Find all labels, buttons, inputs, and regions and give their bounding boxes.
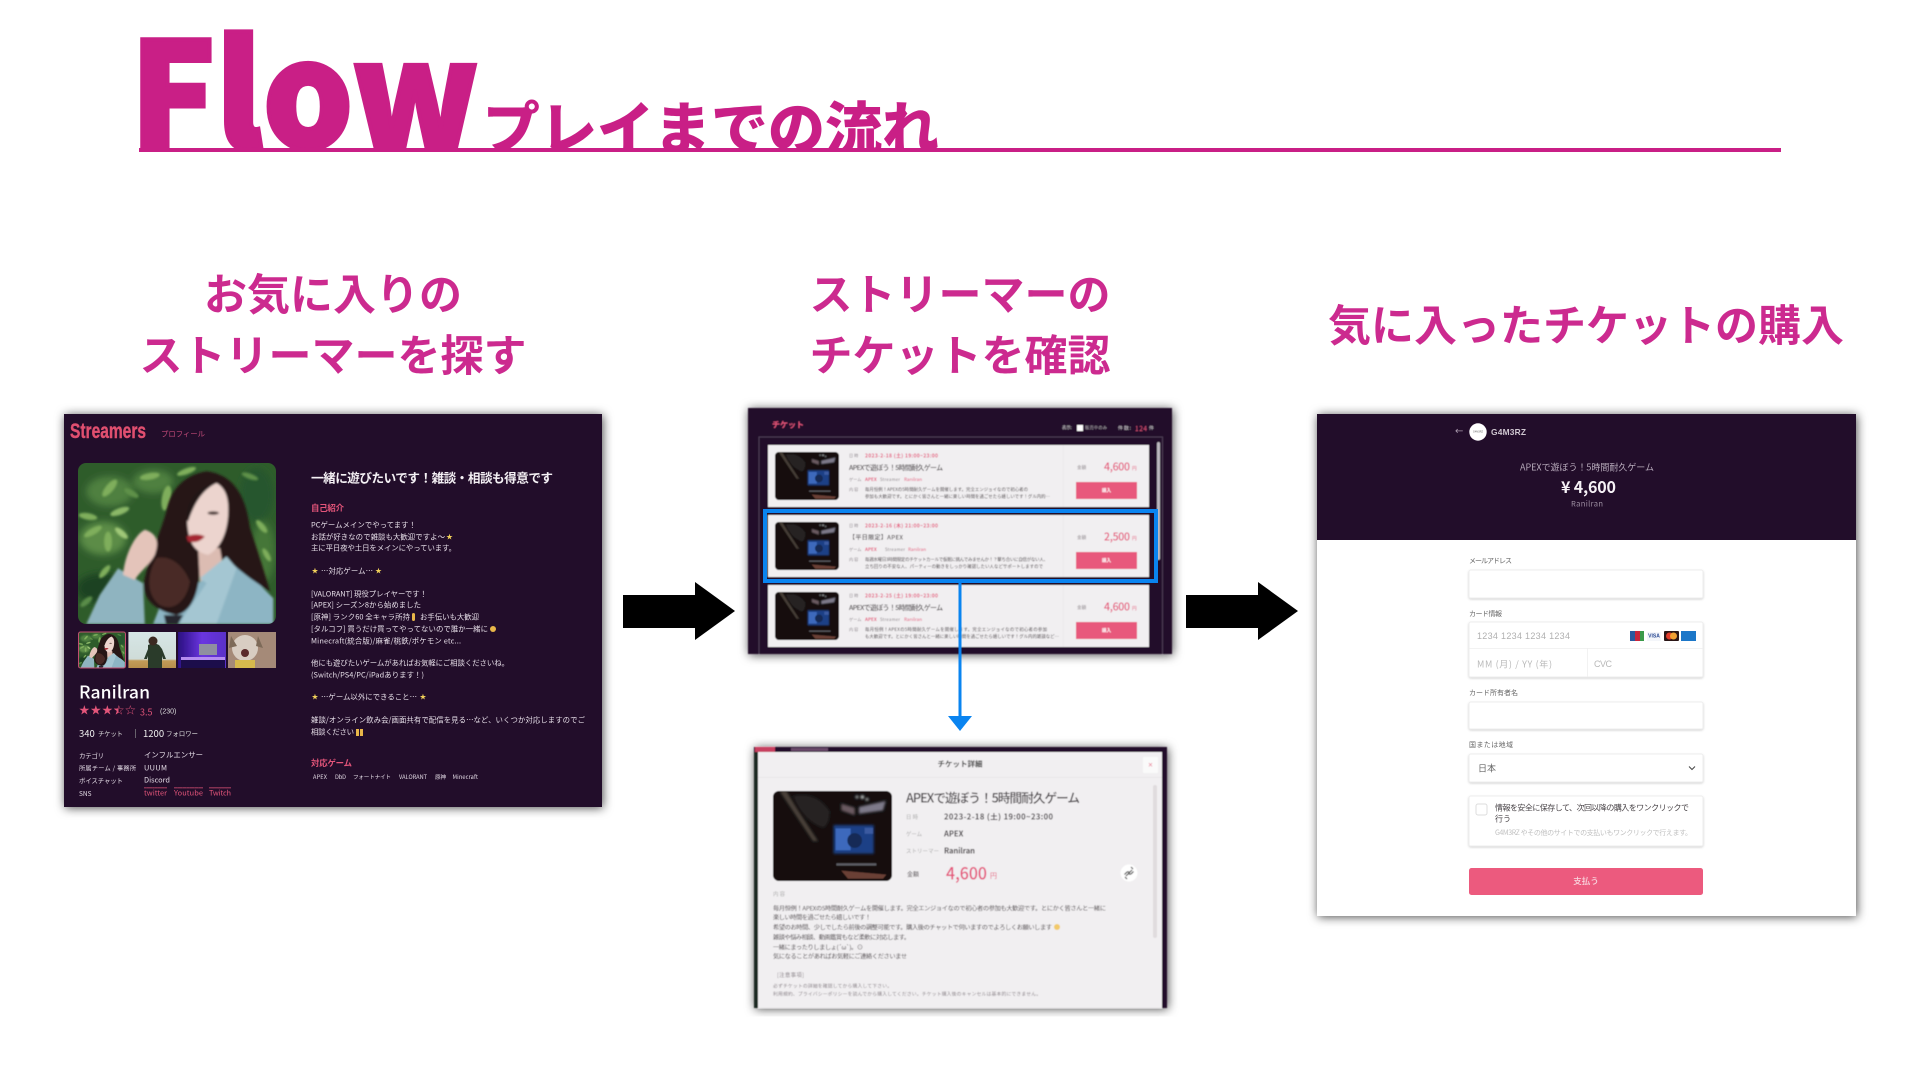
ticket card 2 (highlighted): ゲーム xyxy=(849,546,861,553)
ticket card 3: APEX xyxy=(864,617,877,623)
cardholder field xyxy=(1469,688,1703,729)
section: supported games: Minecraft xyxy=(452,773,479,781)
scrollbar xyxy=(1157,442,1160,560)
ticket card 3: Streamer xyxy=(880,617,900,623)
ticket card 3: Ranilran xyxy=(904,616,922,623)
ticket card 2 (highlighted): 【平日限定】APEX xyxy=(849,532,903,542)
rating stars xyxy=(80,705,176,716)
ticket facts: APEX xyxy=(943,828,964,840)
title xyxy=(139,29,1781,152)
card brand icons xyxy=(1630,631,1696,641)
title underline xyxy=(139,148,1781,152)
profile details table: カテゴリ xyxy=(79,750,104,760)
panel: streamer profile xyxy=(64,414,602,807)
ticket card 1 xyxy=(768,445,1149,507)
ticket facts: Ranilran xyxy=(944,846,975,856)
profile details table: UUUM xyxy=(144,762,167,774)
panel: payment xyxy=(1317,414,1856,916)
ticket card 1: 円 xyxy=(1132,466,1137,472)
rating stars: (230) xyxy=(160,708,176,716)
ticket facts: 金額 xyxy=(907,870,919,878)
heading: step 2 xyxy=(810,261,1110,384)
save info option xyxy=(1469,796,1703,846)
card field xyxy=(1469,609,1703,677)
panel: ticket list xyxy=(748,408,1172,654)
ticket facts: 2023-2-18 (土) 19:00~23:00 xyxy=(944,812,1054,822)
pay button xyxy=(1469,868,1703,895)
ticket card 1: 内 容 xyxy=(849,486,859,493)
ticket card 3: ゲーム xyxy=(849,616,861,623)
list filters and count: 件数: xyxy=(1118,424,1131,432)
list filters and count: 表示: xyxy=(1062,424,1072,431)
ticket card 2 (highlighted): 毎週水曜日3時間限定のチケットカールで仮眠に挑んでみませんか！？撃ち合いに自信がない人、 xyxy=(865,556,1048,563)
title words xyxy=(140,29,938,148)
ticket card 1: ゲーム xyxy=(849,476,861,483)
profile details table: ボイスチャット xyxy=(79,775,123,785)
section: self introduction: PCゲームメインでやってます！ xyxy=(311,520,416,530)
section: self introduction: Minecraft(統合版)/麻雀/桃鉄/ポケモン etc... xyxy=(311,636,461,646)
ticket card 2 (highlighted): 立ち回りの不安な人、パーティーの動きをしっかり確認したい人などサポートしますので xyxy=(865,563,1044,570)
card field: MM (月) / YY (年) xyxy=(1477,658,1552,670)
ticket photo xyxy=(773,791,892,881)
heading: step 3: 気に入ったチケットの購入 xyxy=(1328,292,1844,354)
ticket card 3: 毎月恒例！APEXの5時間耐久ゲームを開催します。完全エンジョイなので初心者の参加 xyxy=(865,626,1047,633)
country select xyxy=(1469,740,1703,782)
description text: 利用規約、プライバシーポリシーを読んでから購入してください。チケット購入後のキャンセルは基本的にできません。 xyxy=(773,990,1041,998)
rating stars: ★ xyxy=(90,704,102,718)
rating stars: ★ xyxy=(78,704,90,718)
payment header xyxy=(1317,414,1856,540)
ticket card 1: 金額 xyxy=(1077,464,1087,471)
profile details table: Discord xyxy=(144,774,170,786)
section: self introduction: [原神] ランク60 全キャラ所持 xyxy=(311,612,411,622)
description text: 雑談や悩み相談、動画鑑賞もなど柔軟に対応します。 xyxy=(773,932,910,942)
ticket card 2 (highlighted): 内 容 xyxy=(849,556,859,563)
ticket facts: 円 xyxy=(990,871,997,881)
list heading: チケット xyxy=(772,420,804,430)
ticket card 1: 購入 xyxy=(1102,487,1111,494)
ticket card 1: 参加も大歓迎です。とにかく皆さんと一緒に楽しい時間を過ごせたら嬉しいです！グル内的… xyxy=(865,493,1050,500)
pay button: 支払う xyxy=(1573,875,1599,887)
list frame xyxy=(759,437,1162,654)
description text: 気になることがあればお気軽にご連絡くださいませ xyxy=(773,952,907,960)
ticket card 1: 毎月恒例！APEXの5時間耐久ゲームを開催します。完全エンジョイなので初心者の xyxy=(865,486,1028,493)
page label: プロフィール xyxy=(161,428,206,440)
profile headline: 一緒に遊びたいです！雑談・相談も得意です xyxy=(311,468,553,486)
profile details table xyxy=(79,750,231,798)
country select: 日本 xyxy=(1478,762,1496,774)
list filters and count xyxy=(1062,423,1154,433)
section: self introduction: お手伝いも大歓迎 xyxy=(420,612,480,622)
section: self introduction: ★ xyxy=(375,566,382,576)
section: self introduction: [タルコフ] 買うだけ買ってやってないので誰か一緒に xyxy=(311,624,488,634)
ticket and follower counts: チケット xyxy=(98,728,123,738)
arrow: highlighted ticket to detail xyxy=(948,583,972,731)
email field: メールアドレス xyxy=(1469,556,1512,566)
description text: 必ずチケットの詳細を確認してから購入して下さい。 xyxy=(773,982,892,990)
country select: 国または地域 xyxy=(1469,740,1513,750)
cardholder field: カード所有者名 xyxy=(1469,688,1518,698)
section: supported games xyxy=(311,757,479,781)
section: supported games: DbD xyxy=(335,773,346,781)
description text: 内 容 xyxy=(773,890,786,898)
section: self introduction: [VALORANT] 現役プレイヤーです！ xyxy=(311,588,427,600)
ticket card 3: APEXで遊ぼう！5時間耐久ゲーム xyxy=(849,602,943,612)
section: self introduction: …対応ゲーム… xyxy=(321,566,373,576)
ticket card 2 (highlighted): Streamer xyxy=(885,547,905,553)
section: self introduction: [APEX] シーズン8から始めました xyxy=(311,600,421,610)
arrow: profile to tickets xyxy=(623,582,735,640)
section: self introduction: 自己紹介 xyxy=(311,502,345,514)
ticket facts: 4,600 xyxy=(946,860,987,884)
payment header: G4M3RZ xyxy=(1473,430,1484,434)
close button xyxy=(1143,757,1158,773)
section: supported games: 対応ゲーム xyxy=(311,757,352,769)
section: self introduction: …ゲーム以外にできること… xyxy=(321,692,417,702)
description text xyxy=(773,890,1106,998)
ticket facts xyxy=(906,812,1054,884)
ticket card 1: 2023-2-18 (土) 19:00~23:00 xyxy=(865,452,938,460)
section: self introduction: (Switch/PS4/PC/iPadあります！) xyxy=(311,670,424,680)
ticket card 3 xyxy=(768,585,1149,647)
ticket card 3: 金額 xyxy=(1077,604,1087,611)
ticket card 3: 日 時 xyxy=(849,593,859,599)
ticket and follower counts: フォロワー xyxy=(166,728,198,738)
ticket card 2 (highlighted): 日 時 xyxy=(849,523,859,529)
heading: step 1: ストリーマーを探す xyxy=(140,322,526,384)
scrollbar xyxy=(1153,785,1157,938)
section: self introduction: お話が好きなので雑談も大歓迎ですよ～ xyxy=(311,532,446,542)
rating stars: ☆ xyxy=(124,704,136,718)
section: self introduction: 他にも遊びたいゲームがあればお気軽にご相談くださいね。 xyxy=(311,658,509,668)
profile details table: 所属チーム / 事務所 xyxy=(79,764,136,772)
payment header: APEXで遊ぼう！5時間耐久ゲーム xyxy=(1520,460,1654,474)
section: supported games: VALORANT xyxy=(399,773,428,781)
heading: step 2: チケットを確認 xyxy=(810,322,1110,384)
save info option: 情報を安全に保存して、次回以降の購入をワンクリックで xyxy=(1495,802,1689,814)
profile details table: Youtube xyxy=(173,788,203,798)
ticket card 3: も大歓迎です。とにかく皆さんと一緒に楽しい時間を過ごせたら嬉しいです！グル内的雑談など… xyxy=(865,633,1059,640)
payment header: ¥ 4,600 xyxy=(1561,474,1616,498)
ticket card 2 (highlighted): 円 xyxy=(1132,536,1137,542)
payment header: Ranilran xyxy=(1571,498,1603,510)
ticket card 2 (highlighted): 購入 xyxy=(1102,557,1111,564)
ticket card 3: 4,600 xyxy=(1104,600,1130,614)
ticket facts: ゲーム xyxy=(906,830,923,838)
profile details table: インフルエンサー xyxy=(144,750,203,760)
thumbnail row xyxy=(78,632,276,668)
section: self introduction: ★ xyxy=(419,692,427,702)
highlight frame xyxy=(765,511,1156,581)
main photo xyxy=(76,463,276,624)
profile details table: SNS xyxy=(79,788,92,798)
card field: CVC xyxy=(1594,659,1612,669)
description text: 毎月恒例！APEXの5時間耐久ゲームを開催します。完全エンジョイなので初心者の参加も大歓迎です。とにかく皆さんと一緒に xyxy=(773,904,1106,912)
ticket card 1: APEXで遊ぼう！5時間耐久ゲーム xyxy=(849,462,943,472)
card field: 1234 1234 1234 1234 xyxy=(1477,631,1570,641)
rating stars: ★ xyxy=(102,704,113,718)
panel: ticket detail modal xyxy=(754,747,1167,1008)
description text: 楽しい時間を過ごせたら嬉しいです！ xyxy=(773,912,871,922)
ticket card 1: Ranilran xyxy=(904,476,922,483)
ticket card 1: APEX xyxy=(864,477,877,483)
ticket facts: ストリーマー xyxy=(906,847,939,855)
section: supported games: APEX xyxy=(313,773,328,781)
ticket card 2 (highlighted) xyxy=(768,515,1149,577)
brand logo: Streamers xyxy=(70,420,146,443)
description text: [注意事項] xyxy=(777,971,804,979)
list filters and count: 124 xyxy=(1135,423,1147,433)
profile details table: twitter xyxy=(144,788,167,798)
ticket card 2 (highlighted): APEX xyxy=(864,547,877,553)
ticket card 3: 内 容 xyxy=(849,626,859,633)
email field xyxy=(1469,556,1703,598)
ticket card 3: 購入 xyxy=(1102,627,1111,634)
link icon xyxy=(1120,864,1138,882)
ticket card 3: 円 xyxy=(1132,606,1137,612)
save info option: 行う xyxy=(1495,814,1511,824)
description text: 希望のお時間、少しでしたら前後の調整可能です。購入後のチャットで伺いますのでよろしくお願いします xyxy=(773,922,1052,932)
list filters and count: 販売中のみ xyxy=(1085,424,1107,431)
ticket facts: 日 時 xyxy=(906,813,919,821)
ticket card 2 (highlighted): 金額 xyxy=(1077,534,1087,541)
section: supported games: フォートナイト xyxy=(353,773,391,781)
section: self introduction: ★ xyxy=(311,566,319,576)
payment header: G4M3RZ xyxy=(1491,427,1526,437)
ticket card 2 (highlighted): 2023-2-16 (木) 21:00~23:00 xyxy=(865,522,938,530)
ticket card 1: 4,600 xyxy=(1104,460,1130,474)
section: self introduction: 雑談/オンライン飲み会/画面共有で配信を見る…など、いくつか対応しますのでご xyxy=(311,714,586,726)
ticket card 3: 2023-2-25 (土) 19:00~23:00 xyxy=(865,592,938,600)
profile details table: Twitch xyxy=(209,788,231,798)
payment header: ← xyxy=(1455,426,1463,437)
ticket name: APEXで遊ぼう！5時間耐久ゲーム xyxy=(906,788,1080,806)
section: self introduction: 相談ください xyxy=(311,726,354,738)
heading: step 1: お気に入りの xyxy=(204,261,462,323)
save info option: G4M3RZ やその他のサイトでの支払いもワンクリックで行えます。 xyxy=(1495,828,1692,838)
section: self introduction: 主に平日夜や土日をメインにやっています。 xyxy=(311,542,456,554)
section: self introduction: ★ xyxy=(446,532,453,542)
list filters and count: 件 xyxy=(1149,424,1154,432)
section: self introduction xyxy=(311,502,586,738)
ticket and follower counts: 1200 xyxy=(143,726,164,740)
ticket and follower counts xyxy=(79,726,198,740)
rating stars: 3.5 xyxy=(140,706,152,718)
close button: × xyxy=(1148,760,1153,770)
description text: 一緒にまったりしましょ(´ω`)。⊙ xyxy=(773,942,863,952)
rating stars: ☆ xyxy=(113,704,125,718)
card field: カード情報 xyxy=(1469,609,1502,619)
rating stars: ★ xyxy=(113,704,125,718)
ticket card 1: Streamer xyxy=(880,477,900,483)
modal title: チケット詳細 xyxy=(938,758,983,770)
ticket card 2 (highlighted): Ranilran xyxy=(908,546,926,553)
heading: step 1 xyxy=(140,261,526,384)
title words: プレイまでの流れ xyxy=(483,84,939,166)
ticket card 2 (highlighted): 2,500 xyxy=(1104,530,1130,544)
streamer name: Ranilran xyxy=(79,680,150,704)
modal body xyxy=(758,752,1162,1008)
heading: step 2: ストリーマーの xyxy=(810,261,1110,323)
background page remnants xyxy=(755,747,828,752)
ticket card 1: 日 時 xyxy=(849,453,859,459)
section: self introduction: ★ xyxy=(311,692,319,702)
card brand icons: VISA xyxy=(1648,634,1660,640)
ticket and follower counts: 340 xyxy=(79,726,95,740)
arrow: tickets to payment xyxy=(1186,582,1298,640)
section: supported games: 原神 xyxy=(435,773,446,781)
